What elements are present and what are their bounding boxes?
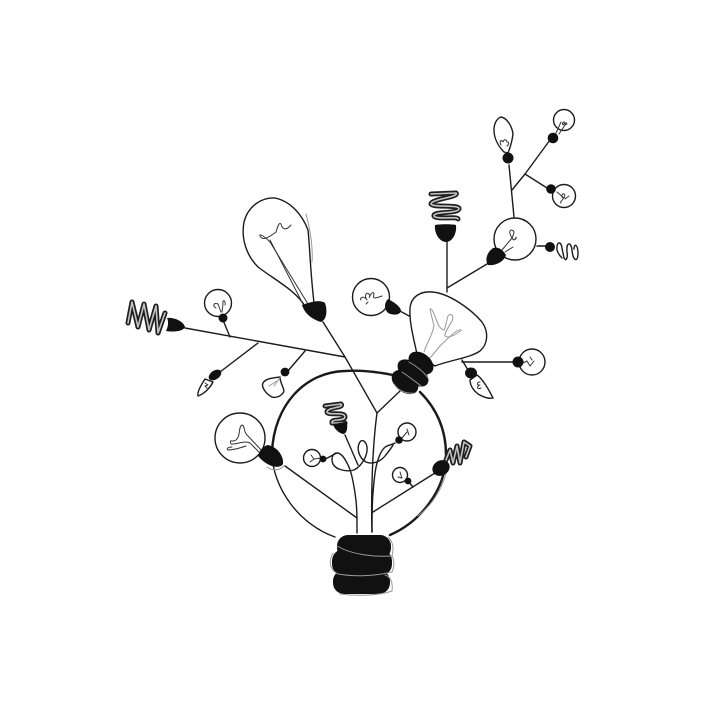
branches: connecting wires [185,140,550,532]
bulb: small round on left branch [204,290,232,322]
main bulb: large outline [272,371,447,537]
bulb: top spiral [431,193,459,242]
bulb: left round bulb on main [215,413,284,470]
bulb: left round of secondary [352,278,401,316]
bulb: large pear [243,198,326,322]
bulb: right round lower [546,184,576,208]
filament wires with curls inside main bulb [325,441,395,533]
secondary bulb: outline [410,292,487,366]
bulb: far left spiral [128,302,185,333]
bulb: top candle [494,117,514,164]
bulb: small round left inside main [304,450,326,466]
bulb: small pear on left branch [263,368,289,397]
bulb: upper right round [486,218,536,265]
bulb: spiral right of upper round [545,242,578,260]
main bulb: black screw base [330,535,394,595]
bulb: spiral bulb at right of main [429,442,470,479]
bulb: small candle on left branch [198,367,223,396]
bulb: right round of secondary [512,349,545,375]
bulb: small round lower inside main [392,468,411,484]
bulb: candle below secondary [465,368,493,398]
secondary bulb: black screw base [387,347,438,399]
bulb: top right round [548,110,574,143]
bulb: small round right inside main [395,423,416,444]
bulb: spiral bulb inside main [325,404,347,434]
